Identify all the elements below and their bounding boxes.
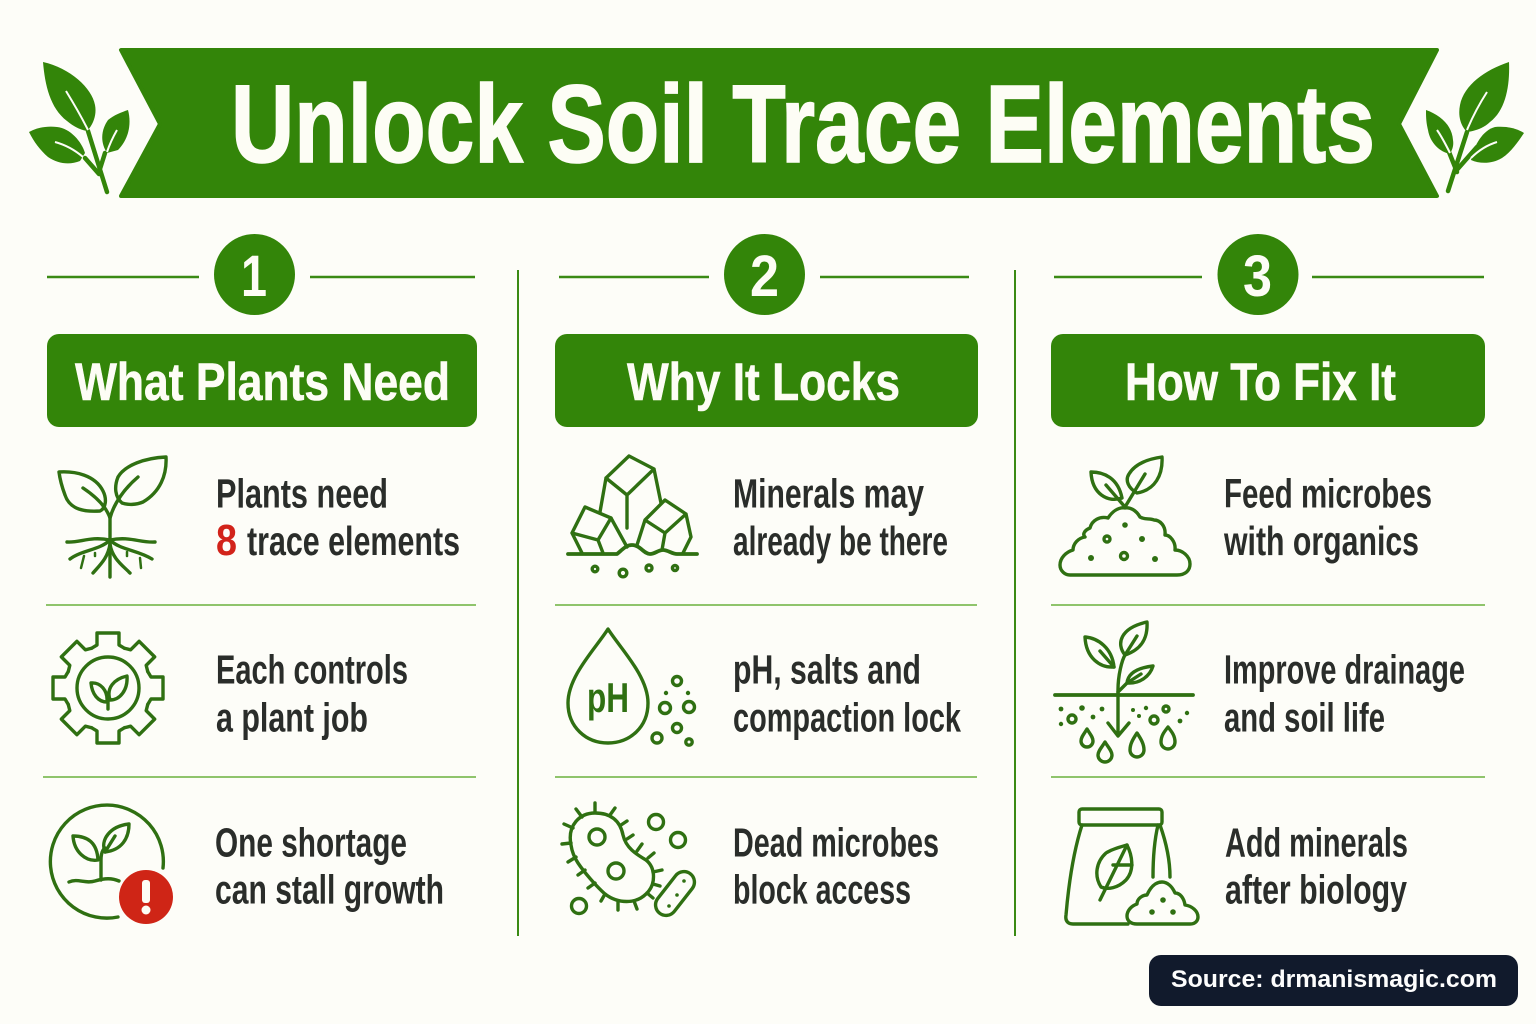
row text: add minerals after biology: Add minerals — [1225, 820, 1408, 866]
row text: improve drainage and soil life — [1224, 646, 1465, 740]
panel: why it locks — [555, 234, 978, 920]
row text: plants need 8 trace elements: 8 — [216, 516, 237, 565]
heading: why it locks — [555, 334, 978, 427]
row text: improve drainage and soil life: and soil life — [1224, 694, 1385, 740]
icon: drainage plant — [1055, 622, 1193, 762]
icon: gear with sprout — [53, 633, 163, 743]
row text: dead microbes block access — [733, 820, 939, 912]
heading: why it locks: Why It Locks — [627, 353, 900, 412]
icon: microbes — [562, 803, 699, 920]
row text: ph, salts and compaction lock: pH, salts and — [733, 646, 921, 692]
row text: feed microbes with organics — [1223, 470, 1432, 564]
row text: plants need 8 trace elements: Plants need — [216, 470, 388, 516]
icon: left leaf sprig — [29, 62, 130, 192]
source badge — [1149, 955, 1518, 1006]
row text: minerals may already be there — [733, 470, 948, 564]
icon: right leaf sprig — [1426, 62, 1524, 191]
row text: one shortage can stall growth — [215, 820, 444, 912]
number badge 3: 3 — [1243, 244, 1272, 309]
icon: mineral rocks — [568, 456, 697, 577]
icon: pH drop with salts: pH — [587, 674, 629, 721]
icon: pH drop with salts — [568, 629, 694, 745]
row text: ph, salts and compaction lock: compaction lock — [733, 694, 961, 740]
heading: how to fix it: How To Fix It — [1125, 353, 1396, 412]
number badge 1 — [47, 234, 475, 315]
number badge 2 — [559, 234, 969, 315]
row text: add minerals after biology: after biology — [1225, 866, 1407, 912]
row text: one shortage can stall growth: One shortage — [215, 820, 407, 866]
icon: sprout on compost mound — [1060, 457, 1190, 575]
row text: one shortage can stall growth: can stall growth — [215, 866, 444, 912]
heading: what plants need — [47, 334, 477, 427]
source badge: Source: drmanismagic.com — [1171, 966, 1497, 993]
row text: feed microbes with organics: with organics — [1223, 518, 1419, 564]
icon: plant with roots — [59, 457, 166, 577]
heading: how to fix it — [1051, 334, 1485, 427]
number badge 2: 2 — [750, 244, 779, 309]
row text: each controls a plant job — [216, 646, 408, 740]
panel: what plants need — [43, 234, 477, 924]
row text: add minerals after biology — [1225, 820, 1408, 912]
row text: minerals may already be there: already be there — [733, 518, 948, 564]
warning badge — [119, 870, 173, 924]
row text: plants need 8 trace elements: trace elements — [247, 518, 460, 564]
row text: plants need 8 trace elements — [216, 470, 460, 565]
row text: minerals may already be there: Minerals may — [733, 470, 924, 516]
icon: fertilizer bag with minerals — [1066, 809, 1198, 924]
row text: feed microbes with organics: Feed microbes — [1224, 470, 1432, 516]
title banner — [121, 50, 1437, 196]
row text: each controls a plant job: a plant job — [216, 694, 368, 740]
panel: how to fix it — [1051, 234, 1485, 924]
row text: each controls a plant job: Each controls — [216, 646, 408, 692]
number badge 1: 1 — [241, 244, 267, 309]
row text: ph, salts and compaction lock — [733, 646, 961, 740]
number badge 3 — [1054, 234, 1484, 315]
row text: dead microbes block access: Dead microbes — [733, 820, 939, 866]
row text: dead microbes block access: block access — [733, 866, 911, 912]
icon: sprout with warning — [50, 805, 173, 924]
heading: what plants need: What Plants Need — [75, 353, 450, 412]
